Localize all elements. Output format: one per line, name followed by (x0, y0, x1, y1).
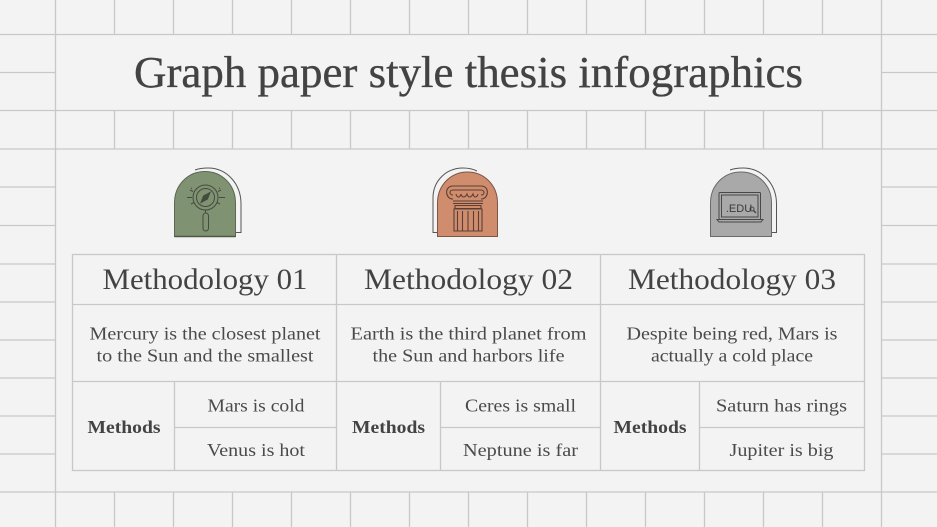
column 1 text: to the Sun and the smallest (96, 346, 314, 366)
icon: laptop on grey arch: .EDU (726, 203, 752, 215)
icon: compass magnifier on green arch (174, 168, 241, 236)
column 2 text: the Sun and harbors life (372, 346, 564, 366)
column 3 text: Methods (614, 417, 686, 437)
column 3 text: Methodology 03 (628, 263, 836, 296)
column 2 text: Neptune is far (463, 440, 578, 460)
column 1 text: Mercury is the closest planet (90, 324, 320, 344)
column 3 text: actually a cold place (651, 346, 813, 366)
column 2 text: Methodology 02 (364, 263, 573, 296)
column 1 text: Methods (88, 417, 160, 437)
column 3 text (614, 263, 847, 460)
column 1 text: Methodology 01 (102, 263, 308, 296)
icon: laptop on grey arch (710, 168, 776, 236)
column 2 text: Methods (352, 417, 425, 437)
column 2 text: Earth is the third planet from (350, 324, 586, 344)
table (72, 254, 864, 470)
column 2 text: Ceres is small (465, 396, 576, 416)
column 3 text: Saturn has rings (716, 396, 847, 416)
column 1 text: Mars is cold (208, 396, 304, 416)
title: Graph paper style thesis infographics (134, 48, 803, 97)
column 1 text (88, 263, 320, 460)
column 3 text: Jupiter is big (730, 440, 834, 460)
column 2 text (350, 263, 586, 460)
icon: column on orange arch (433, 168, 498, 236)
column 1 text: Venus is hot (207, 440, 305, 460)
column 3 text: Despite being red, Mars is (626, 324, 838, 344)
